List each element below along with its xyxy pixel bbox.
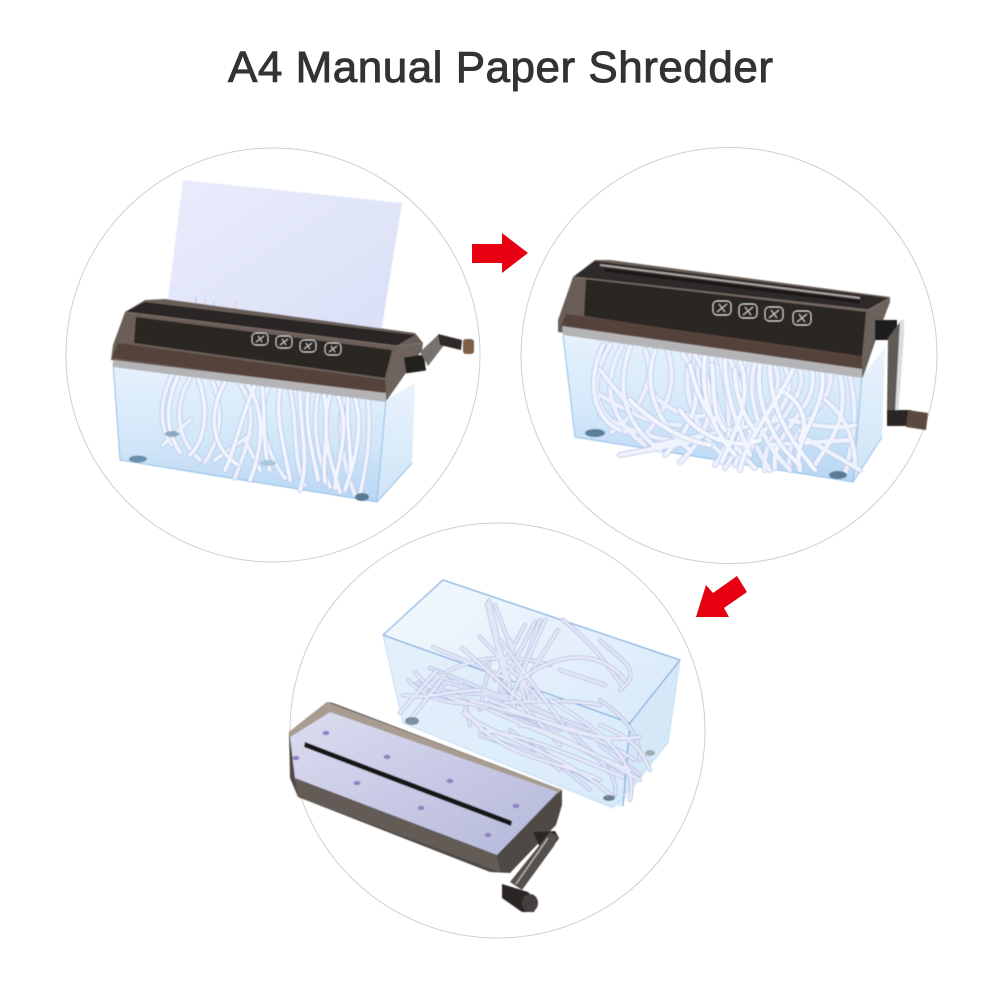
opened shredder: emptied bin bbox=[289, 580, 680, 912]
panel: circle step 3 bbox=[290, 523, 705, 938]
suction feet bbox=[405, 717, 655, 801]
panel: circle step 1 bbox=[66, 148, 480, 562]
shredder with paper being fed bbox=[111, 180, 474, 502]
suction feet bbox=[129, 431, 398, 501]
arrow: step 2 to step 3 bbox=[696, 576, 747, 617]
paper strips in bin bbox=[594, 345, 860, 475]
screw holes bbox=[292, 731, 520, 837]
sheet of paper bbox=[167, 180, 402, 333]
panel: circle step 2 bbox=[521, 148, 937, 564]
dark lid bbox=[558, 260, 890, 378]
hand crank bbox=[875, 320, 928, 430]
lid icons bbox=[713, 301, 811, 325]
paper strips in bin bbox=[162, 375, 369, 495]
suction feet bbox=[585, 429, 847, 479]
title: A4 Manual Paper Shredder bbox=[228, 43, 773, 92]
paper strips in bin bbox=[400, 600, 650, 800]
hand crank bbox=[502, 831, 559, 912]
clear bin bbox=[563, 335, 885, 482]
clear bin bbox=[113, 363, 415, 502]
lid icons bbox=[252, 333, 341, 355]
printed colour marks on paper bbox=[194, 297, 236, 315]
clear bin bbox=[383, 580, 680, 808]
arrow: step 1 to step 2 bbox=[472, 233, 528, 273]
dark lid bbox=[111, 299, 423, 402]
shredder with full bin bbox=[558, 260, 928, 482]
open lid tray bbox=[289, 702, 562, 873]
shredding slot bbox=[304, 742, 512, 826]
hand crank bbox=[404, 334, 474, 373]
